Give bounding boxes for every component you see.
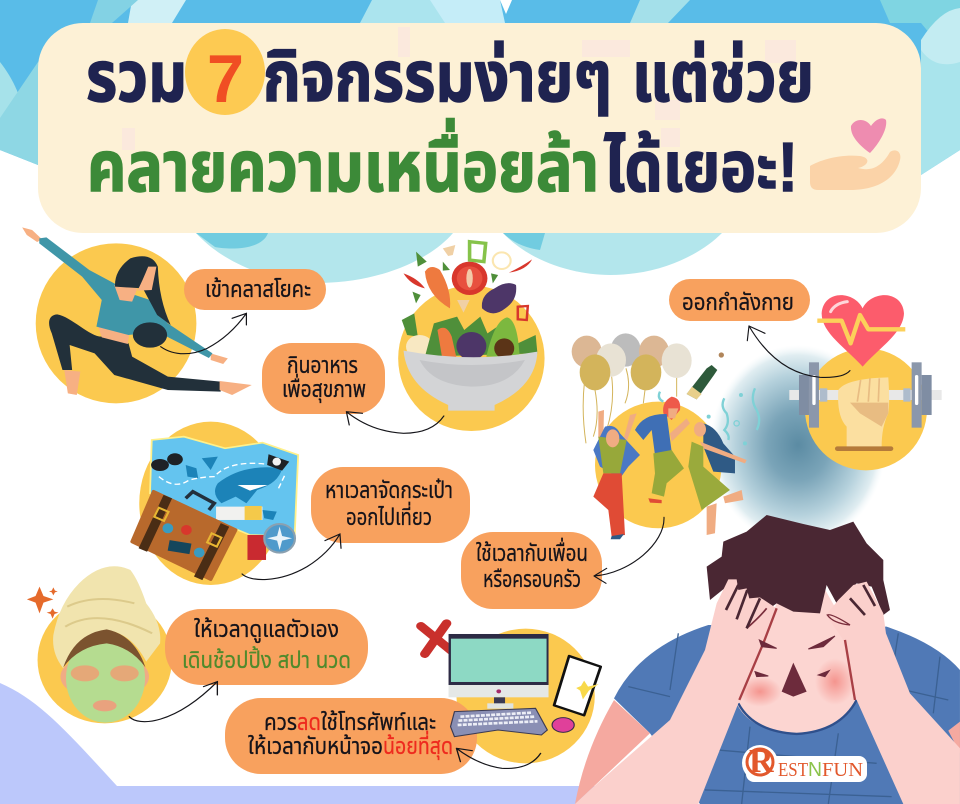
yellow circle (38, 597, 172, 723)
panel: self care (27, 566, 172, 723)
eye patches (71, 665, 99, 681)
blue top blobs (0, 0, 960, 283)
arrow: self care to label (129, 682, 217, 722)
label: reduce screen time: น้อยที่สุด (383, 730, 453, 760)
towel (53, 566, 160, 668)
panel: healthy food (398, 242, 545, 431)
mouse (552, 718, 574, 732)
arrow: exercise to label (747, 326, 850, 377)
yellow circle (139, 422, 282, 585)
label: reduce screen time: ลด (297, 709, 321, 735)
label: reduce screen time: ควร (264, 709, 297, 735)
yellow circle (595, 402, 722, 528)
arrow: party to label (594, 517, 664, 583)
smoke cloud (710, 345, 886, 545)
label: healthy food: เพื่อสุขภาพ (282, 373, 366, 403)
sparkles (27, 587, 58, 619)
icon: red cross (421, 623, 454, 654)
title line 1: แต่ช่วย (632, 38, 814, 116)
right arm and hand (826, 582, 960, 804)
logo: N (808, 759, 822, 781)
label: exercise: ออกกำลังกาย (682, 289, 794, 315)
lips (93, 700, 117, 711)
label: self care: เดินช้อปปิ้ง สปา นวด (182, 645, 351, 673)
label: pack and travel (311, 467, 470, 543)
panel: travel (132, 422, 298, 585)
flying vegetables (404, 242, 532, 320)
ticket (216, 507, 262, 520)
panel: screen time illustration (421, 623, 601, 763)
arrow: yoga to label (161, 313, 246, 354)
label: friends and family: ใช้เวลากับเพื่อน (476, 537, 588, 566)
panel: party (572, 333, 759, 539)
logo (742, 743, 867, 782)
hair (63, 629, 145, 667)
icon: heart with pulse (817, 295, 905, 367)
label: reduce screen time: ให้เวลากับหน้าจอ (248, 733, 383, 759)
woman (22, 227, 252, 395)
panel: yoga (22, 227, 252, 403)
squiggles (659, 388, 759, 440)
label: self care: ให้เวลาดูแลตัวเอง (194, 616, 339, 644)
upper arm left (575, 700, 650, 804)
facial features (782, 663, 807, 697)
label: healthy food (262, 343, 385, 414)
label: self care (165, 609, 368, 685)
label: healthy food: กินอาหาร (287, 352, 358, 378)
bowl contents (402, 313, 537, 360)
lavender bottom shape (0, 683, 620, 804)
man (663, 397, 680, 420)
label: friends and family: หรือครอบครัว (483, 566, 581, 592)
logo: FUN (822, 759, 863, 781)
title line 2: คลายความเหนื่อยล้า (87, 118, 599, 206)
number badge (185, 29, 265, 117)
title panel (38, 23, 921, 233)
left arm and hand (575, 579, 777, 804)
faint ghost marks (122, 27, 796, 150)
passport (247, 535, 266, 560)
bowl (404, 351, 537, 411)
label: pack and travel: หาเวลาจัดกระเป๋า (325, 477, 453, 503)
label: reduce screen time (225, 698, 477, 774)
arrow: food to label (346, 412, 444, 433)
label: friends and family (461, 532, 602, 609)
label: yoga class: เข้าคลาสโยคะ (205, 276, 311, 302)
panel: exercise (789, 295, 942, 470)
yellow circle (398, 286, 545, 431)
title line 1 (86, 38, 814, 116)
icon: fist (838, 377, 889, 447)
right woman (703, 423, 735, 473)
number badge: 7 (207, 41, 244, 117)
title line 1: กิจกรรมง่ายๆ (263, 38, 612, 116)
balloons (572, 333, 692, 443)
yellow circle (456, 629, 595, 763)
yellow circle (36, 243, 196, 403)
yellow circle (805, 348, 927, 470)
monitor (449, 634, 549, 709)
stressed man illustration (575, 515, 960, 804)
face (53, 566, 160, 723)
compass (264, 524, 295, 553)
label: yoga class (184, 269, 326, 310)
phone (554, 656, 601, 715)
hair (707, 515, 890, 620)
dumbbell (789, 362, 942, 428)
title line 2: ได้เยอะ! (604, 128, 798, 206)
logo: R (749, 743, 774, 780)
logo: EST (778, 759, 808, 781)
suitcase (132, 492, 236, 579)
icon: hand with heart (810, 118, 900, 190)
label: exercise (669, 279, 810, 321)
people (593, 397, 747, 539)
label: pack and travel: ออกไปเที่ยว (346, 501, 432, 530)
arrow: travel to label (242, 534, 341, 580)
base line (835, 446, 893, 451)
shirt (614, 625, 960, 804)
keyboard (451, 708, 547, 737)
label: reduce screen time: ใช้โทรศัพท์และ (321, 709, 436, 735)
title line 1: รวม (86, 38, 187, 116)
arrow: screen to label (456, 748, 541, 768)
champagne bottle (687, 352, 724, 399)
map (150, 437, 298, 537)
face (737, 587, 857, 733)
left woman (598, 410, 637, 442)
